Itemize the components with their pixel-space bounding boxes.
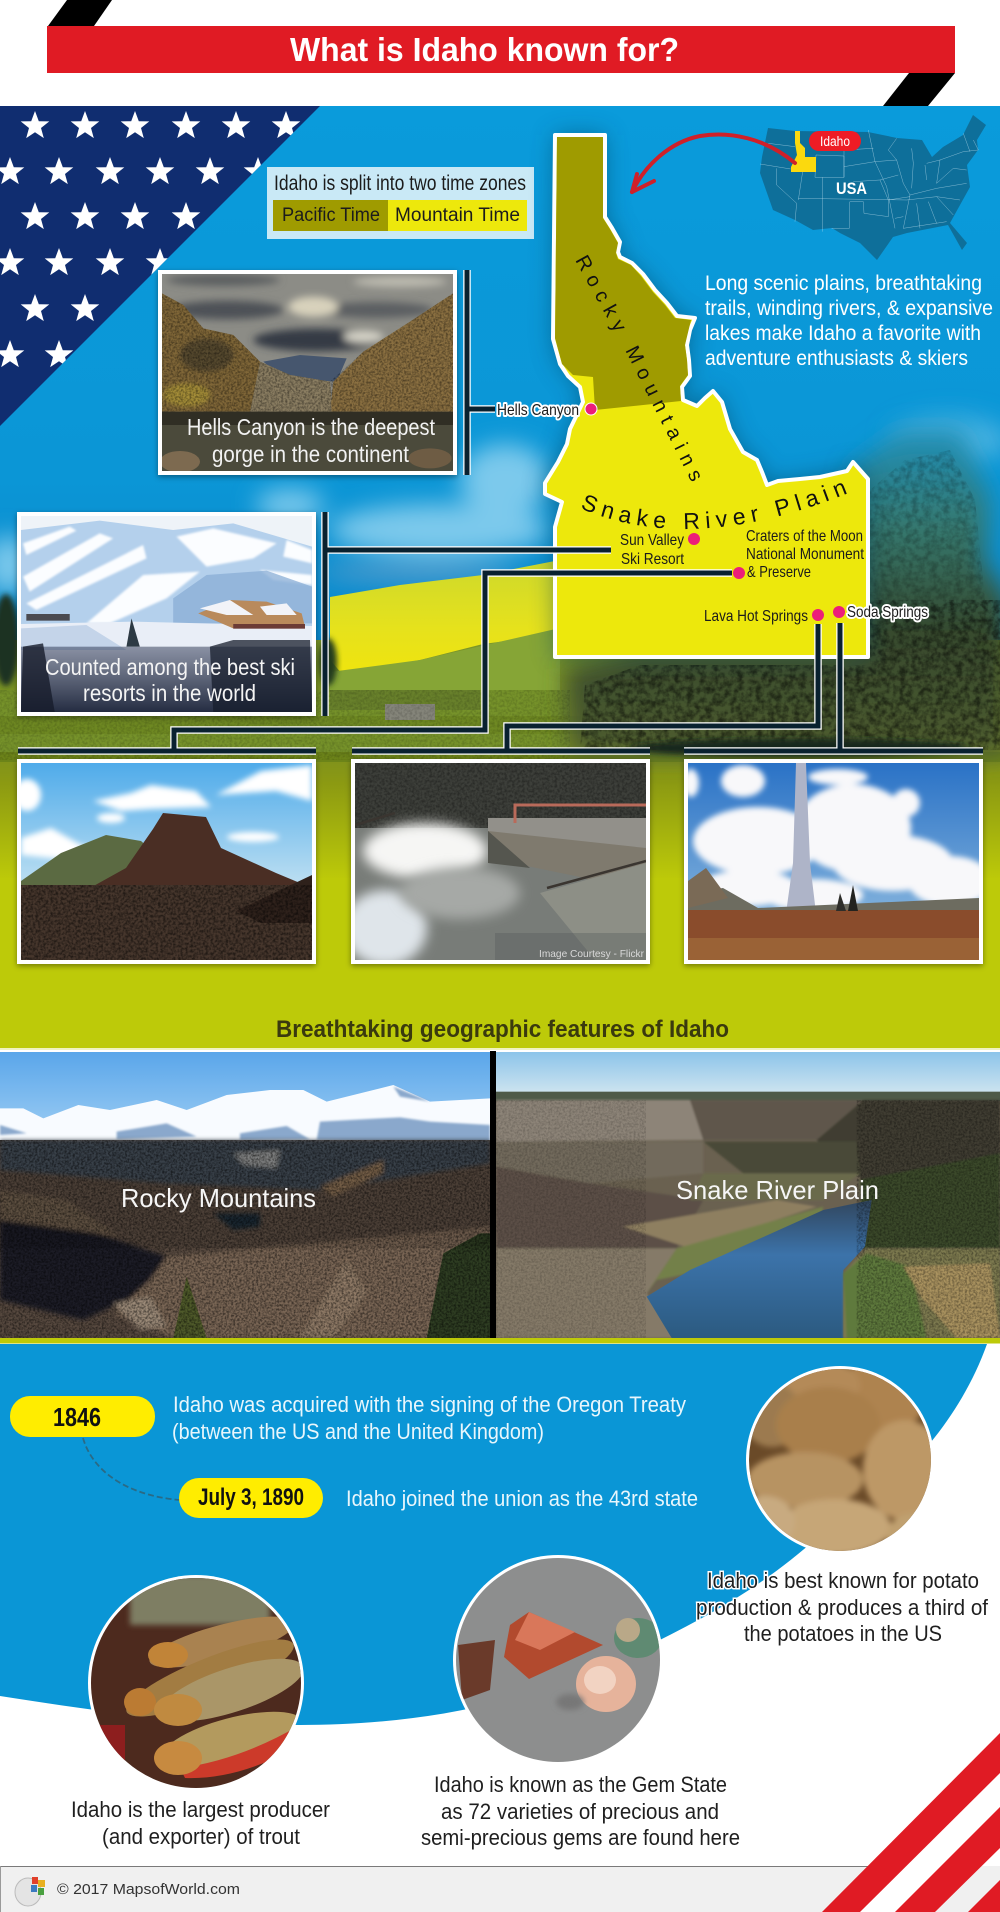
yellow field — [330, 560, 560, 675]
timeline: 1846 — [53, 1402, 101, 1432]
Sun Valley marker: Sun Valley — [620, 532, 684, 549]
time zones legend — [267, 167, 534, 239]
Lava Hot Springs marker: Lava Hot Springs — [704, 608, 808, 625]
photo: ski resort: Counted among the best ski — [45, 654, 295, 680]
photo: Snake River Plain — [496, 1052, 1000, 1338]
title banner — [47, 0, 955, 106]
trout fact — [71, 1575, 330, 1849]
Idaho pill — [809, 131, 861, 151]
photo: Snake River Plain: Snake River Plain — [676, 1175, 879, 1205]
intro text — [705, 272, 993, 370]
gem text: Idaho is known as the Gem State — [434, 1772, 727, 1797]
Hells Canyon marker: Hells Canyon — [497, 402, 579, 419]
Sun Valley marker — [620, 532, 700, 568]
Sun Valley marker: Ski Resort — [621, 551, 684, 568]
USA label: USA — [836, 179, 867, 198]
pacific time zone — [555, 137, 691, 410]
Soda Springs marker: Soda Springs — [847, 604, 928, 621]
Craters of the Moon marker — [733, 528, 864, 581]
time zones legend: Mountain Time — [395, 205, 520, 226]
red corner stripes — [822, 1733, 1000, 1912]
gem text: semi-precious gems are found here — [421, 1825, 740, 1850]
left trees — [0, 594, 19, 686]
intro text: Long scenic plains, breathtaking — [705, 272, 982, 295]
Craters of the Moon marker: & Preserve — [747, 564, 811, 581]
photo: Lava Hot Springs: Image Courtesy - Flickr — [539, 948, 644, 960]
photo: Hells Canyon — [158, 270, 457, 475]
timeline connector — [83, 1438, 179, 1500]
potato fact — [696, 1353, 989, 1646]
photo: ski resort — [17, 512, 316, 716]
photo: Hells Canyon: Hells Canyon is the deepest — [187, 414, 436, 440]
USA locator map: Idaho — [820, 134, 850, 149]
photo: Hells Canyon: gorge in the continent — [212, 441, 410, 467]
blue swoosh background — [0, 1344, 987, 1725]
Idaho map — [534, 122, 876, 668]
Craters of the Moon marker: National Monument — [746, 546, 864, 563]
US flag corner with stars — [0, 106, 320, 426]
footer — [0, 1866, 1000, 1912]
mountain time zone — [545, 135, 868, 657]
trout text: Idaho is the largest producer — [71, 1797, 330, 1822]
intro text: adventure enthusiasts & skiers — [705, 347, 968, 370]
Craters of the Moon marker: Craters of the Moon — [746, 528, 863, 545]
map glow — [545, 135, 868, 657]
1890 text: Idaho joined the union as the 43rd state — [346, 1486, 698, 1511]
time zones legend: Idaho is split into two time zones — [274, 172, 526, 195]
potato text: production & produces a third of — [696, 1595, 989, 1620]
timeline: (between the US and the United Kingdom) — [172, 1419, 544, 1444]
timeline: July 3, 1890 — [198, 1484, 304, 1511]
green meadow — [330, 628, 560, 720]
photo: ski resort: resorts in the world — [83, 680, 256, 706]
potato photo — [746, 1366, 932, 1551]
intro text: lakes make Idaho a favorite with — [705, 322, 981, 345]
gem photo — [450, 1555, 670, 1770]
timeline — [10, 1392, 698, 1518]
gem text: as 72 varieties of precious and — [441, 1799, 719, 1824]
connector lines — [18, 270, 983, 751]
potato text — [696, 1568, 989, 1646]
fence and gate — [330, 690, 480, 710]
photo divider — [490, 1051, 496, 1338]
section heading: Breathtaking geographic features of Idaho — [276, 1016, 729, 1043]
1846 pill — [10, 1396, 155, 1437]
photo: Rocky Mountains — [0, 1052, 490, 1338]
red arrow — [632, 134, 795, 192]
landscape background — [0, 106, 1000, 1050]
photo: Soda Springs geyser — [683, 759, 992, 964]
footer copyright: © 2017 MapsofWorld.com — [57, 1881, 240, 1898]
lime rule — [0, 1338, 1000, 1344]
trout text: (and exporter) of trout — [102, 1824, 300, 1849]
photo: Rocky Mountains: Rocky Mountains — [121, 1183, 316, 1213]
title: What is Idaho known for? — [290, 31, 679, 68]
label: Rocky Mountains: Rocky Mountains — [576, 254, 700, 482]
trees right — [565, 430, 1000, 755]
heading rule — [0, 1048, 1000, 1050]
label: Snake River Plain: Snake River Plain — [582, 483, 847, 530]
photo: Lava Hot Springs — [343, 759, 650, 966]
Idaho highlight — [791, 131, 816, 172]
1846 text: Idaho was acquired with the signing of the Oregon Treaty — [173, 1392, 686, 1417]
trout text — [71, 1797, 330, 1849]
gem fact — [421, 1555, 740, 1850]
gem text — [421, 1772, 740, 1850]
1890 pill — [179, 1478, 323, 1518]
ground — [0, 640, 1000, 880]
USA locator map — [760, 115, 986, 260]
potato text: the potatoes in the US — [744, 1621, 942, 1646]
trout photo — [85, 1575, 311, 1795]
potato text: Idaho is best known for potato — [707, 1568, 979, 1593]
red title bar — [47, 26, 955, 73]
time zones legend: Pacific Time — [282, 205, 380, 226]
black ribbon fold right — [883, 73, 955, 106]
photo: Craters of the Moon — [13, 759, 316, 964]
map location labels — [497, 402, 928, 625]
black ribbon fold left — [48, 0, 112, 26]
footer logo — [15, 1877, 45, 1906]
